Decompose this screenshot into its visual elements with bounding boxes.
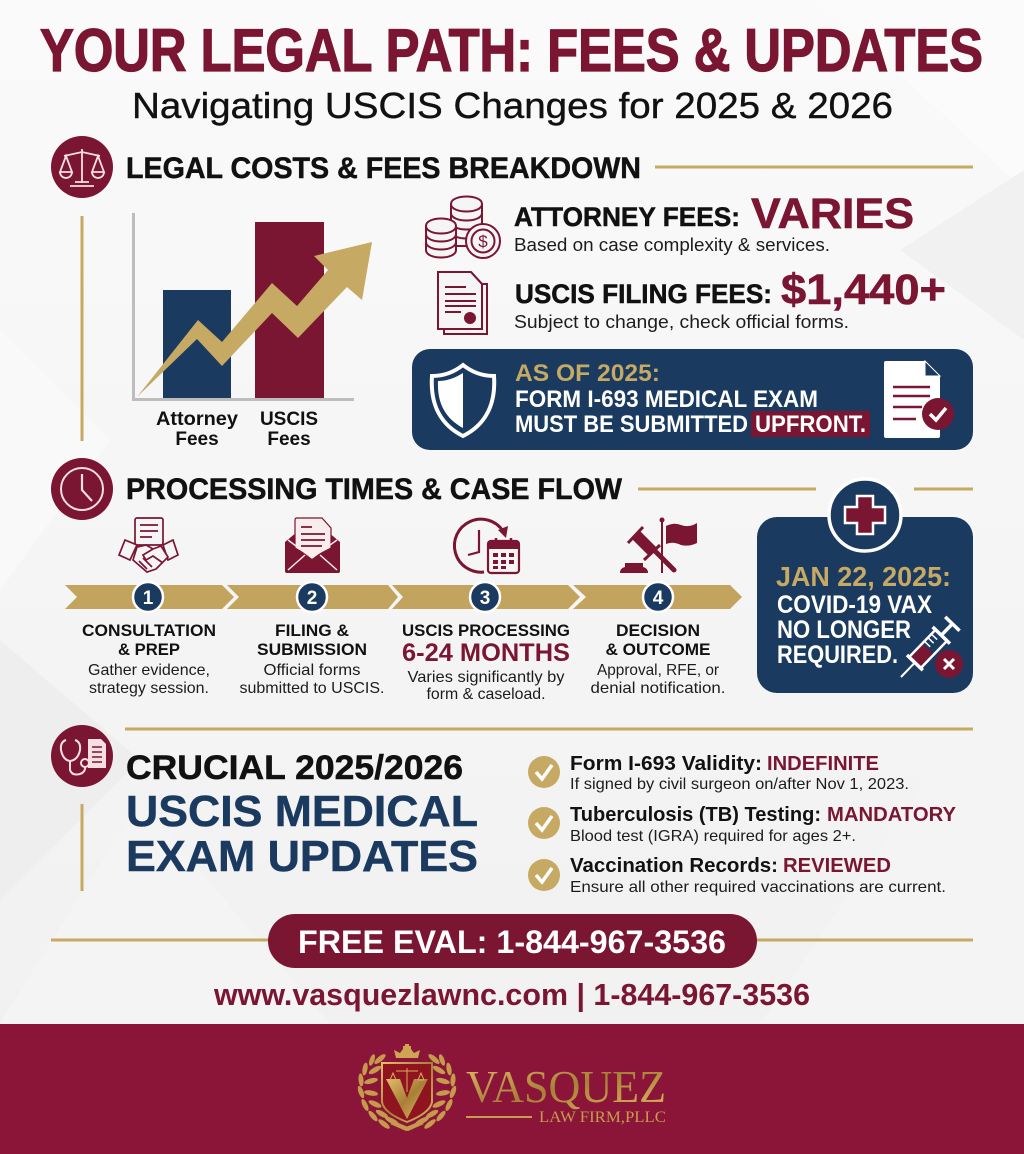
timeline arrows <box>65 585 742 609</box>
text: no longer: NO LONGER <box>777 616 911 644</box>
logo: firm type: LAW FIRM,PLLC <box>539 1109 666 1126</box>
text: uscis processing: USCIS PROCESSING <box>402 621 570 640</box>
icon: cross badge <box>935 650 963 678</box>
logo: firm name: VASQUEZ <box>466 1061 666 1112</box>
note: filing fees: Subject to change, check official forms. <box>514 312 849 332</box>
icon: scales of justice <box>51 136 113 198</box>
icon: check <box>528 756 560 788</box>
value: reviewed: REVIEWED <box>783 855 891 877</box>
heading: crucial 2025/2026: CRUCIAL 2025/2026 <box>126 749 463 787</box>
number 4: 4 <box>653 588 664 609</box>
note: civil surgeon: If signed by civil surgeon on/after Nov 1, 2023. <box>570 776 909 793</box>
text: uscis filing fees: USCIS FILING FEES: <box>515 279 772 309</box>
step 3 <box>402 519 570 703</box>
footer band <box>0 1024 1024 1154</box>
text: vaccination records: Vaccination Records: <box>570 855 778 877</box>
text: tuberculosis testing: Tuberculosis (TB) Testing: <box>570 804 821 826</box>
icon: medical cross <box>829 479 901 551</box>
bar: uscis fees <box>255 222 324 398</box>
icon: envelope <box>285 518 340 573</box>
note: official forms: Official forms <box>264 662 360 679</box>
label: attorney fees: Attorney <box>156 409 238 430</box>
call to action button <box>268 914 757 968</box>
highlight: upfront: UPFRONT. <box>755 411 866 438</box>
step 1 <box>82 518 216 697</box>
text: form i-693 validity: Form I-693 Validity: <box>570 753 762 775</box>
list item: tb testing <box>528 804 957 845</box>
icon: handshake and paper <box>119 518 178 572</box>
number 3 <box>470 582 500 612</box>
number 1 <box>133 582 163 612</box>
text: required: REQUIRED. <box>777 641 898 669</box>
note: submitted to uscis: submitted to USCIS. <box>240 680 384 697</box>
heading: legal costs: LEGAL COSTS & FEES BREAKDOWN <box>126 152 641 185</box>
text: jan 22 2025: JAN 22, 2025: <box>776 561 951 592</box>
text: filing and: FILING & <box>275 621 349 640</box>
note: gather evidence: Gather evidence, <box>88 662 210 679</box>
note: denial notification: denial notification. <box>590 680 726 697</box>
heading: exam updates: EXAM UPDATES <box>126 832 478 881</box>
step 2 <box>240 518 384 697</box>
number 4 <box>643 582 673 612</box>
list item: form validity <box>528 753 909 793</box>
number 3: 3 <box>480 588 490 609</box>
value: filing fees amount: $1,440+ <box>781 266 946 314</box>
heading: processing times: PROCESSING TIMES & CASE FLOW <box>126 473 623 506</box>
text: form i-693: FORM I-693 MEDICAL EXAM <box>515 386 818 413</box>
number 1: 1 <box>143 588 154 609</box>
logo: right laurel <box>401 1053 458 1131</box>
arrow: rising trend <box>137 242 372 397</box>
note: vaccinations current: Ensure all other required vaccinations are current. <box>570 879 946 896</box>
text: decision: DECISION <box>616 621 700 640</box>
text: covid-19 vax: COVID-19 VAX <box>777 591 932 619</box>
number 2 <box>297 582 327 612</box>
logo: crown <box>394 1044 420 1058</box>
text: as of 2025: AS OF 2025: <box>515 360 660 387</box>
icon: gavel and flag <box>620 518 697 573</box>
icon: document check <box>884 361 954 438</box>
text: uscis filing fees <box>514 266 946 332</box>
text: and outcome: & OUTCOME <box>606 640 710 659</box>
logo: shield <box>382 1063 432 1122</box>
panel: medical exam updates <box>51 725 973 896</box>
callout: form i-693 <box>412 349 973 450</box>
icon: shield <box>432 365 494 436</box>
icon: check <box>528 859 560 891</box>
bar chart <box>132 213 372 450</box>
note: varies significantly: Varies significantly by <box>408 669 564 686</box>
heading: uscis medical: USCIS MEDICAL <box>126 787 478 836</box>
value: varies: VARIES <box>751 190 914 238</box>
list item: vaccination records <box>528 855 946 896</box>
value: 6-24 months: 6-24 MONTHS <box>402 639 570 667</box>
icon: clock <box>51 458 113 520</box>
note: attorney fees: Based on case complexity & services. <box>514 235 830 255</box>
label: uscis fees line two: Fees <box>267 429 311 450</box>
text: attorney fees: ATTORNEY FEES: <box>514 202 740 232</box>
text: consultation: CONSULTATION <box>82 621 216 640</box>
text: and prep: & PREP <box>118 640 180 659</box>
panel: processing times <box>51 458 973 703</box>
label: uscis: USCIS <box>260 409 318 430</box>
icon: clock and calendar <box>454 519 519 573</box>
value: mandatory: MANDATORY <box>827 804 957 826</box>
value: indefinite: INDEFINITE <box>767 753 879 775</box>
logo: vasquez law firm <box>356 1044 666 1131</box>
icon: coins: $ <box>478 232 488 251</box>
note: strategy session: strategy session. <box>89 680 209 697</box>
text: submission: SUBMISSION <box>257 640 367 659</box>
number 2: 2 <box>307 588 317 609</box>
text: must be submitted: MUST BE SUBMITTED <box>515 411 748 438</box>
logo: left laurel <box>356 1053 413 1131</box>
note: approval: Approval, RFE, or <box>597 662 720 679</box>
icon: coins <box>426 196 500 258</box>
note: blood test: Blood test (IGRA) required for ages 2+. <box>570 828 856 845</box>
contact line: www.vasquezlawnc.com | 1-844-967-3536 <box>213 977 810 1012</box>
step 4 <box>590 518 726 697</box>
call to action button: FREE EVAL: 1-844-967-3536 <box>298 924 726 960</box>
label: attorney fees line two: Fees <box>175 429 219 450</box>
icon: stethoscope and record <box>51 725 113 787</box>
icon: check <box>528 807 560 839</box>
text: attorney fees <box>514 190 914 255</box>
icon: syringe crossed out <box>892 615 961 685</box>
note: form and caseload: form & caseload. <box>426 686 546 703</box>
callout: covid vaccine <box>757 479 973 693</box>
subtitle: Navigating USCIS Changes for 2025 & 2026 <box>132 85 893 126</box>
bar: attorney fees <box>163 290 231 398</box>
icon: filing document <box>438 272 487 334</box>
